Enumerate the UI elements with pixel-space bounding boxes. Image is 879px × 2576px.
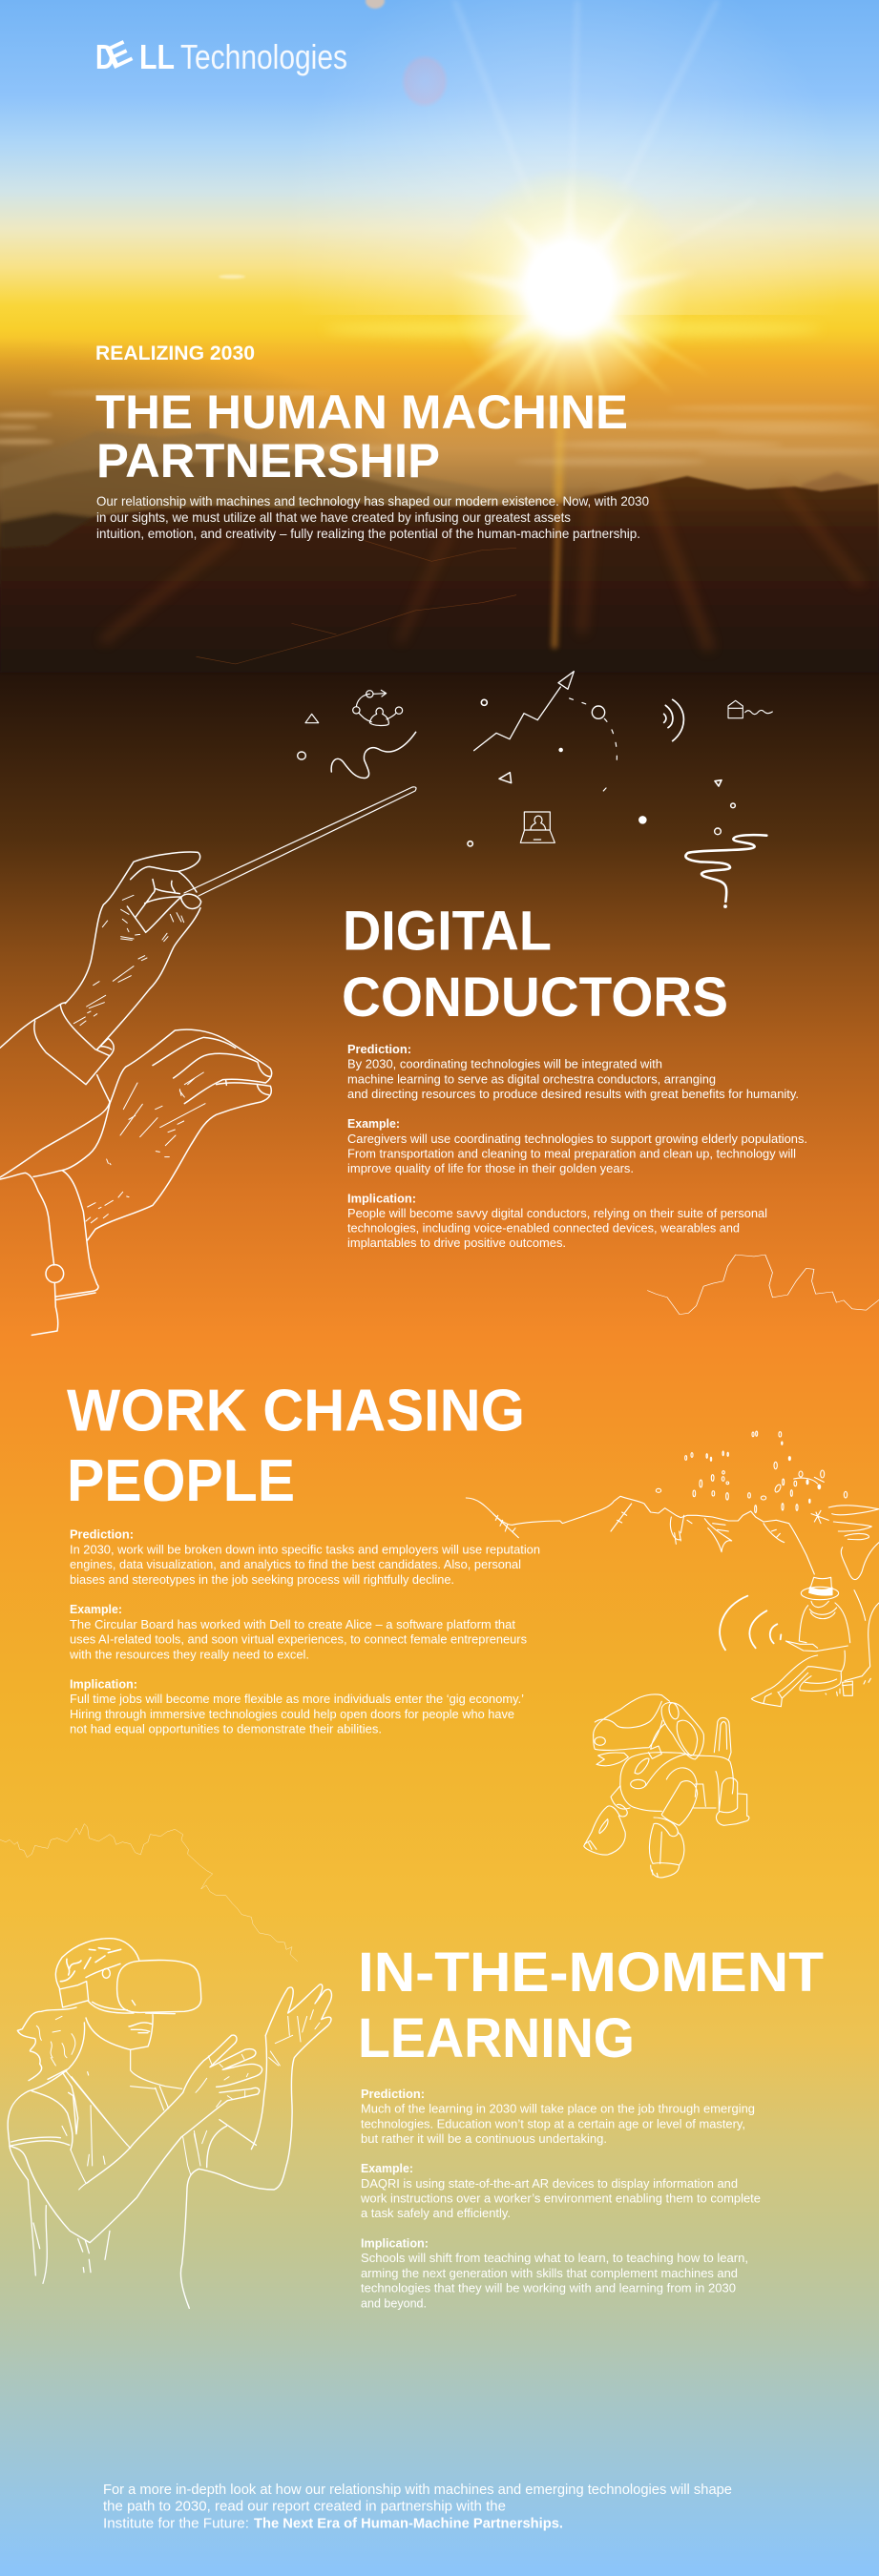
icon: large dot — [639, 817, 646, 823]
person under tree — [751, 1577, 870, 1707]
foreground arm — [10, 2035, 262, 2243]
implication: Implication: — [70, 1676, 137, 1691]
icon: laptop with person — [520, 812, 555, 842]
implication: Implication: — [361, 2235, 429, 2250]
icon: house with wave — [728, 700, 772, 718]
mountain ridge lines — [197, 510, 879, 664]
face — [86, 2015, 153, 2049]
prediction: Prediction: — [347, 1042, 411, 1056]
upper cuff — [0, 1003, 114, 1085]
implication: technologies that they will be working with and learning from in 2030 — [361, 2281, 736, 2296]
light rays over mountains — [105, 324, 859, 646]
main dark mountain — [0, 476, 879, 673]
lower sleeve — [0, 1075, 110, 1335]
torso — [28, 2180, 110, 2283]
example: with the resources they really need to excel. — [69, 1647, 309, 1661]
example: uses AI-related tools, and soon virtual experiences, to connect female entrepreneurs — [70, 1632, 527, 1647]
icon: open circle — [298, 752, 305, 759]
example: From transportation and cleaning to meal preparation and clean up, technology will — [347, 1146, 796, 1160]
example: Caregivers will use coordinating technologies to support growing elderly populations. — [347, 1132, 807, 1146]
tree foliage sprigs — [493, 1504, 879, 1552]
illustration: conductor hands — [0, 852, 272, 1335]
icon: winding path — [685, 835, 766, 902]
prediction: Much of the learning in 2030 will take place on the job through emerging — [361, 2102, 755, 2116]
headset strap — [59, 1982, 89, 2007]
icon: small ring bottom — [468, 841, 472, 846]
prediction: but rather it will be a continuous undertaking. — [361, 2131, 607, 2146]
heading: IN-THE-MOMENT — [358, 1942, 824, 2004]
prediction: By 2030, coordinating technologies will be integrated with — [347, 1057, 662, 1071]
tree branch — [466, 1496, 814, 1574]
icon: small ring right — [731, 803, 735, 808]
prediction: technologies. Education won’t stop at a certain age or level of mastery, — [361, 2116, 745, 2130]
icon: small circle — [481, 699, 487, 705]
icon: target circle — [592, 706, 605, 718]
hero text block — [95, 343, 649, 541]
illustration: ridge line — [647, 1255, 879, 1315]
icon: small triangle right — [715, 780, 722, 786]
example: work instructions over a worker’s environment enabling them to complete — [360, 2191, 761, 2206]
icon: sound waves — [664, 699, 683, 741]
prediction: machine learning to serve as digital orchestra conductors, arranging — [347, 1071, 716, 1086]
heading: CONDUCTORS — [342, 966, 728, 1028]
illustration: woman wearing VR headset — [8, 1939, 331, 2308]
prediction: In 2030, work will be broken down into specific tasks and employers will use reputation — [70, 1542, 540, 1556]
logo: Dell Technologies: E — [100, 33, 137, 76]
intro paragraph: Our relationship with machines and technology has shaped our modern existence. Now, with 2030 — [96, 493, 649, 509]
main title: THE HUMAN MACHINE — [95, 385, 628, 439]
implication: Implication: — [347, 1191, 416, 1205]
section: In-the-Moment Learning — [358, 1942, 824, 2310]
illustration: conductor baton — [184, 787, 416, 896]
example: a task safely and efficiently. — [361, 2206, 511, 2220]
implication: People will become savvy digital conductors, relying on their suite of personal — [347, 1206, 767, 1220]
prediction: and directing resources to produce desired results with great benefits for humanity. — [347, 1087, 799, 1101]
VR headset — [117, 1960, 201, 2012]
illustration: floating tech icons — [298, 672, 772, 907]
implication: Schools will shift from teaching what to learn, to teaching how to learn, — [361, 2251, 748, 2265]
implication: Full time jobs will become more flexible as more individuals enter the ‘gig economy.’ — [70, 1692, 524, 1706]
illustration: wavy ridge above woman — [0, 1824, 298, 1962]
hero sunrise photo — [0, 0, 879, 673]
heading: LEARNING — [358, 2007, 635, 2069]
intro paragraph: intuition, emotion, and creativity – fully realizing the potential of the human-machine partnership. — [96, 526, 640, 541]
heading: DIGITAL — [343, 901, 552, 962]
eyebrow: Realizing 2030: REALIZING 2030 — [95, 343, 255, 364]
logo: Dell Technologies: LL — [139, 37, 175, 76]
implication: arming the next generation with skills that complement machines and — [361, 2266, 738, 2280]
implication: not had equal opportunities to demonstrate their abilities. — [70, 1722, 382, 1736]
icon: solid dot — [559, 748, 562, 752]
icon: squiggle — [331, 732, 416, 778]
implication: Hiring through immersive technologies could help open doors for people who have — [70, 1707, 514, 1721]
tree trunk — [841, 1543, 879, 1681]
heading: WORK CHASING — [67, 1378, 525, 1444]
icon: wireless signal arcs — [720, 1596, 781, 1650]
implication: technologies, including voice-enabled connected devices, wearables and — [347, 1221, 740, 1236]
example: Example: — [361, 2161, 413, 2175]
intro paragraph: in our sights, we must utilize all that we have created by infusing our greatest assets — [96, 509, 571, 525]
illustration: tree, person and robot dog — [466, 1431, 879, 1878]
icon: end dot — [724, 905, 726, 907]
example: Example: — [347, 1116, 400, 1131]
neck and chest — [88, 2049, 182, 2110]
implication: and beyond. — [361, 2296, 427, 2310]
lower hand — [62, 1029, 272, 1240]
prediction: Prediction: — [70, 1527, 134, 1542]
prediction: biases and stereotypes in the job seeking process will rightfully decline. — [70, 1572, 454, 1587]
icon: growth arrow — [474, 672, 574, 751]
curly hair — [17, 2007, 85, 2081]
prediction: Prediction: — [361, 2087, 425, 2101]
example: The Circular Board has worked with Dell to create Alice – a software platform that — [70, 1617, 515, 1631]
implication: implantables to drive positive outcomes. — [347, 1236, 566, 1250]
example: Example: — [70, 1602, 122, 1616]
robot dog — [584, 1694, 749, 1878]
heading: PEOPLE — [67, 1448, 295, 1514]
icon: dotted orbit — [570, 698, 617, 797]
footer call to action: For a more in-depth look at how our relationship with machines and emerging technologies will shape — [103, 2482, 732, 2498]
icon: network nodes — [353, 691, 403, 714]
icon: ring right — [715, 828, 721, 835]
falling leaves — [656, 1431, 848, 1513]
raised arm and hand — [180, 1984, 331, 2308]
example: DAQRI is using state-of-the-art AR devices to display information and — [361, 2176, 738, 2191]
section: Digital Conductors — [342, 901, 807, 1250]
upper hand — [65, 852, 201, 1049]
prediction: engines, data visualization, and analytics to find the best candidates. Also, personal — [70, 1557, 521, 1571]
icon: people network — [356, 690, 396, 726]
footer call to action: the path to 2030, read our report created in partnership with the — [103, 2499, 506, 2515]
far mountains — [0, 431, 879, 563]
example: improve quality of life for those in their golden years. — [347, 1161, 634, 1175]
logo: Dell Technologies: Technologies — [180, 37, 347, 76]
logo: Dell Technologies: D — [95, 37, 115, 76]
icon: triangle centre — [499, 773, 512, 783]
footer call to action: The Next Era of Human-Machine Partnerships. — [254, 2516, 563, 2532]
sun rays — [441, 296, 711, 420]
logo: Dell Technologies — [95, 33, 347, 76]
main title: PARTNERSHIP — [96, 434, 440, 488]
shirt — [8, 2070, 78, 2180]
hair top — [55, 1939, 139, 1988]
footer call to action: Institute for the Future: — [103, 2516, 249, 2532]
section: Work Chasing People — [67, 1378, 540, 1736]
icon: triangle left — [305, 714, 319, 723]
